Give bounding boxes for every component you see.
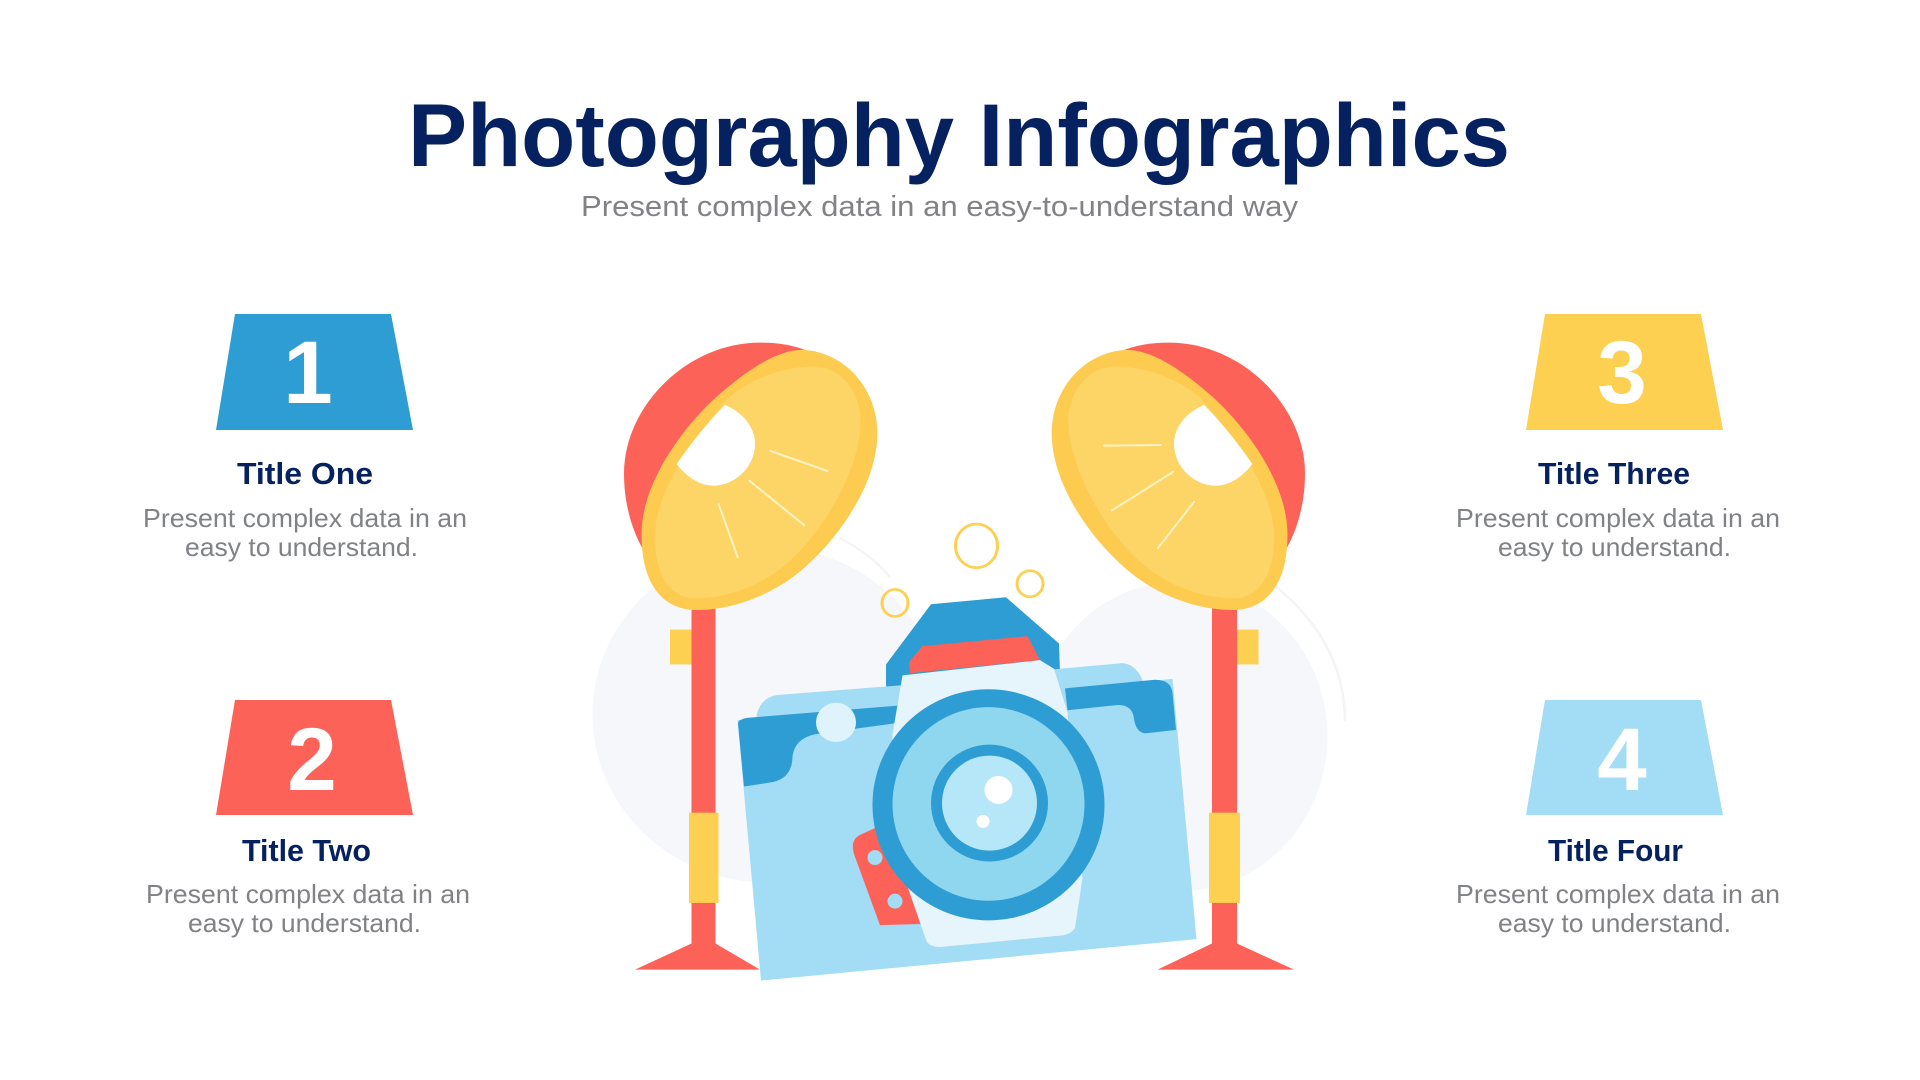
left light stand: [635, 603, 760, 970]
item 4 body: Present complex data in an: [1456, 879, 1780, 909]
item 1 body: easy to understand.: [185, 532, 418, 562]
badge 4: [1526, 700, 1723, 815]
item 3 heading: Title Three: [1538, 456, 1690, 491]
badge 3: [1526, 314, 1723, 430]
item 4 body: easy to understand.: [1498, 908, 1731, 938]
item 4: [1456, 700, 1780, 938]
left lamp: [624, 343, 877, 610]
item 3: [1456, 314, 1780, 562]
right lamp: [1052, 343, 1305, 610]
flash housing: [886, 597, 1060, 688]
right light stand: [1158, 603, 1294, 970]
item 3 body: Present complex data in an: [1456, 503, 1780, 533]
badge 1: [216, 314, 413, 430]
number 4: 4: [1597, 709, 1647, 809]
number 2: 2: [287, 709, 337, 809]
background blobs: [592, 538, 1345, 891]
shutter knob: [816, 703, 856, 742]
item 1 body: Present complex data in an: [143, 503, 467, 533]
item 3 body: easy to understand.: [1498, 532, 1731, 562]
item 2 body: [146, 879, 470, 938]
flash bubbles: [882, 524, 1043, 616]
number 3: 3: [1597, 322, 1647, 422]
top band right: [1065, 680, 1176, 733]
camera body: [738, 679, 1196, 981]
item 1 heading: Title One: [237, 456, 373, 491]
title: Photography Infographics: [408, 85, 1510, 185]
flash red panel: [909, 636, 1040, 673]
item 1: [143, 314, 467, 562]
subtitle: Present complex data in an easy-to-understand way: [581, 191, 1299, 223]
item 2 body: Present complex data in an: [146, 879, 470, 909]
item 4 heading: Title Four: [1548, 833, 1683, 868]
top band left: [738, 705, 900, 787]
camera shoulders: [756, 663, 1155, 739]
red grip tab: [853, 828, 925, 925]
illustration: camera with studio lights: [592, 343, 1345, 981]
item 4 body: [1456, 879, 1780, 938]
lens: [872, 689, 1104, 920]
item 2 body: easy to understand.: [188, 908, 421, 938]
item 3 body: [1456, 503, 1780, 562]
item 1 body: [143, 503, 467, 562]
camera: [738, 597, 1196, 981]
number 1: 1: [283, 322, 333, 422]
badge 2: [216, 700, 413, 815]
item 2 heading: Title Two: [242, 833, 371, 868]
item 2: [146, 700, 470, 938]
lens housing: [892, 660, 1082, 947]
